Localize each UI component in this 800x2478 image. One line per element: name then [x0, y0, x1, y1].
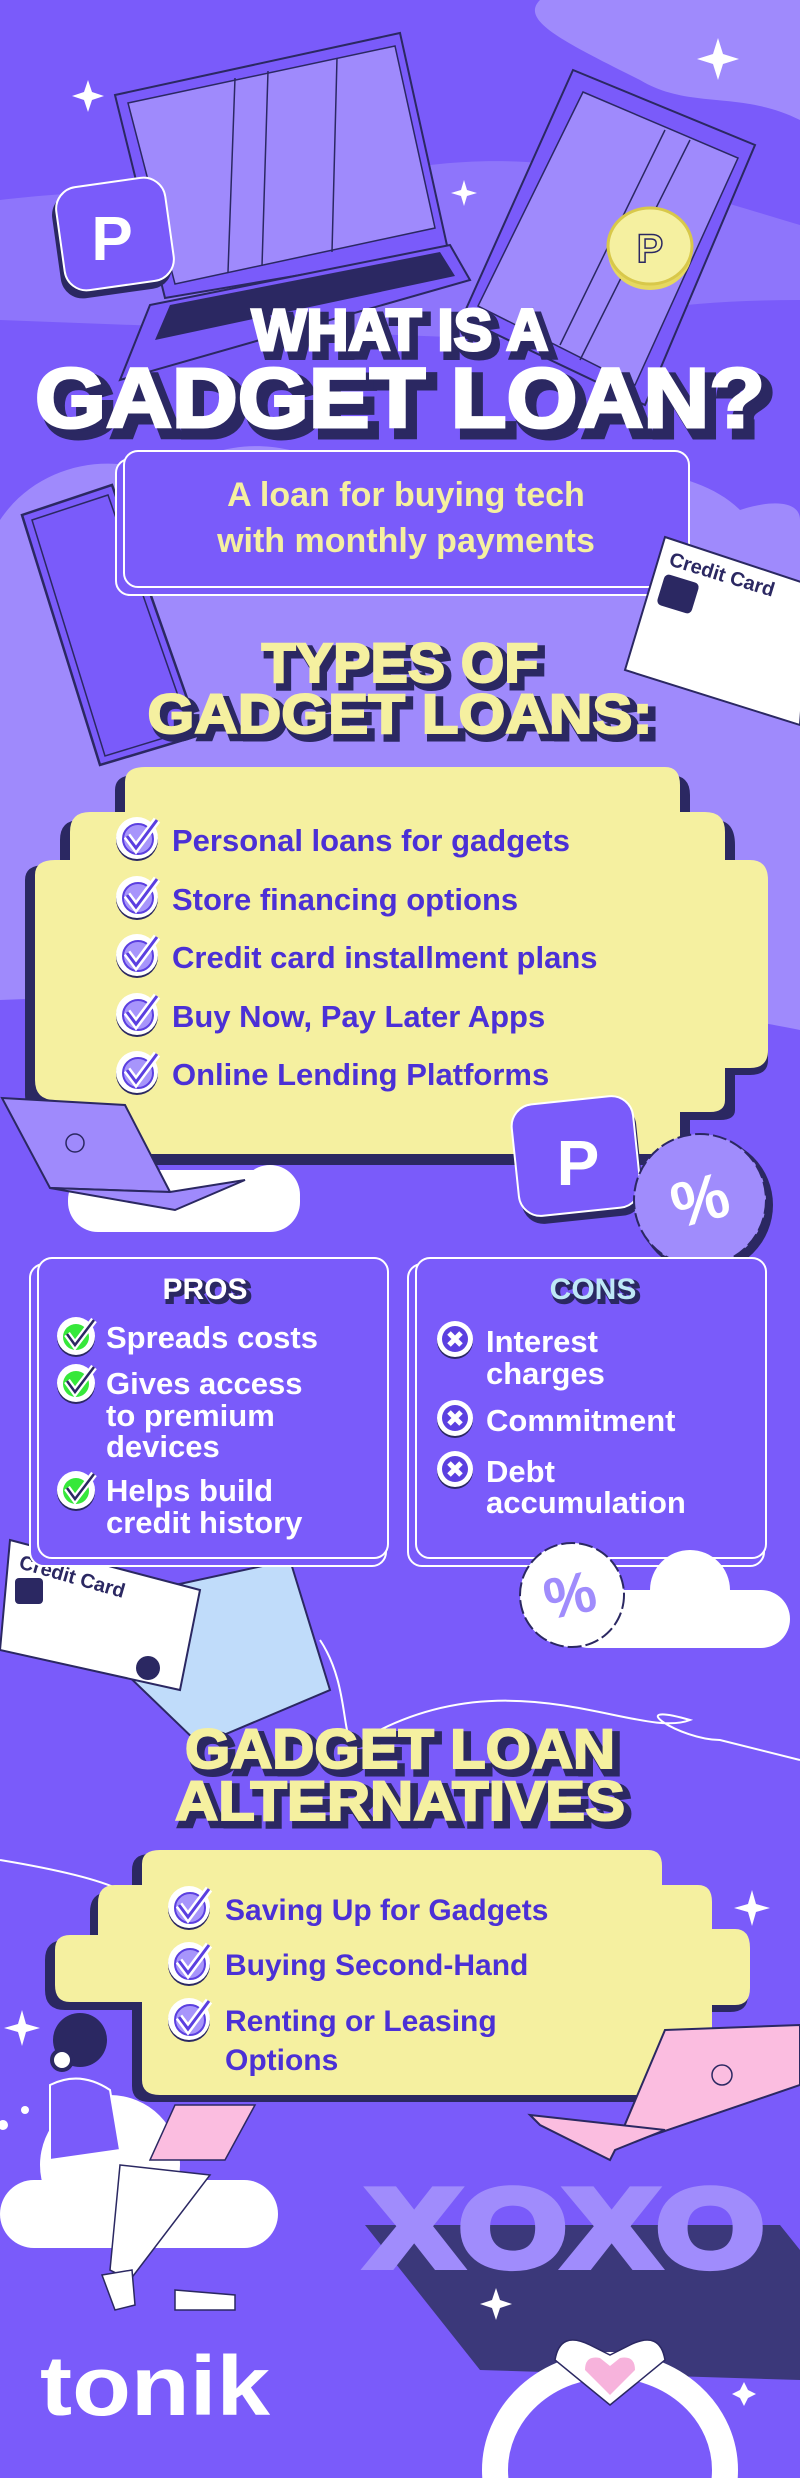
- subtitle box: [116, 451, 689, 595]
- panel: types list: Store financing options: [172, 882, 518, 917]
- XOXO: XOXO: [368, 2167, 764, 2290]
- panel: types list: [25, 767, 768, 1165]
- panel: pros: Spreads costs: [106, 1320, 318, 1355]
- XOXO: [365, 2167, 800, 2380]
- panel: alternatives list: [45, 1850, 750, 2102]
- subtitle box: A loan for buying tech: [227, 476, 585, 514]
- panel: cons: [408, 1258, 766, 1566]
- panel: alternatives list: Saving Up for Gadgets: [225, 1894, 548, 1927]
- title: WHAT IS A: [258, 304, 554, 369]
- panel: cons: Commitment: [486, 1403, 675, 1438]
- title: [35, 298, 773, 453]
- panel: pros: PROS: [165, 1276, 251, 1309]
- panel: cons: charges: [486, 1356, 605, 1391]
- panel: pros: Helps build: [106, 1473, 273, 1508]
- panel: pros: PROS: [162, 1273, 248, 1306]
- panel: alternatives list: Renting or Leasing: [225, 2005, 497, 2038]
- illustration: credit cards: [0, 1540, 330, 1745]
- panel: cons: CONS: [553, 1276, 639, 1309]
- title: GADGET LOAN?: [35, 351, 765, 445]
- icon: P badge: [509, 1094, 646, 1226]
- panel: cons: CONS: [550, 1273, 636, 1306]
- panel: pros: devices: [106, 1429, 220, 1464]
- heading: alternatives: ALTERNATIVES: [180, 1774, 630, 1837]
- illustration: pink laptop: [530, 2025, 800, 2160]
- panel: types list: Personal loans for gadgets: [172, 823, 570, 858]
- credit card top right: Credit Card: [667, 549, 777, 602]
- panel: cons: accumulation: [486, 1485, 686, 1520]
- panel: types list: Credit card installment plans: [172, 940, 598, 975]
- illustration: person on cloud: [0, 2013, 278, 2310]
- icon: heart hands: [495, 2340, 725, 2478]
- illustration: credit cards: Credit Card: [17, 1552, 127, 1603]
- icon: P badge top: P: [91, 205, 133, 274]
- heading: types of gadget loans: GADGET LOANS:: [148, 682, 652, 745]
- heading: alternatives: [175, 1717, 630, 1837]
- logo: tonik: tonik: [40, 2339, 270, 2433]
- icon: coin P: P: [637, 227, 663, 271]
- illustration: cloud with percent: [520, 1543, 790, 1648]
- heading: types of gadget loans: [148, 631, 658, 750]
- illustration: cloud with percent: %: [538, 1558, 602, 1633]
- illustration: cloud + laptop: [2, 1098, 300, 1232]
- heading: alternatives: GADGET LOAN: [185, 1717, 615, 1780]
- icon: coin P: [608, 208, 692, 290]
- icon: percent gear: [634, 1134, 773, 1273]
- panel: types list: Buy Now, Pay Later Apps: [172, 999, 545, 1034]
- icon: percent gear: %: [663, 1158, 737, 1242]
- sparkles: [4, 38, 770, 2046]
- panel: pros: Gives access: [106, 1366, 303, 1401]
- heading: alternatives: GADGET LOAN: [190, 1722, 620, 1785]
- decorative lines: [320, 1640, 800, 1760]
- subtitle box: with monthly payments: [216, 522, 595, 560]
- illustration: tablet: [462, 70, 755, 405]
- heading: alternatives: ALTERNATIVES: [175, 1769, 625, 1832]
- credit card top right: [625, 537, 800, 725]
- panel: pros: credit history: [106, 1505, 303, 1540]
- illustration: phone left: [22, 485, 200, 765]
- icon: P badge: P: [557, 1127, 599, 1199]
- title: GADGET LOAN?: [43, 359, 773, 453]
- illustration: laptop top: [115, 33, 470, 380]
- icon: sparkle small: [480, 2288, 756, 2406]
- panel: alternatives list: Options: [225, 2044, 338, 2077]
- title: WHAT IS A: [252, 298, 548, 363]
- panel: pros: to premium: [106, 1398, 275, 1433]
- panel: cons: Debt: [486, 1454, 555, 1489]
- heading: types of gadget loans: TYPES OF: [262, 631, 538, 694]
- panel: alternatives list: Buying Second-Hand: [225, 1949, 528, 1982]
- icon: P badge top: [49, 175, 177, 301]
- heading: types of gadget loans: TYPES OF: [267, 636, 543, 699]
- panel: cons: Interest: [486, 1324, 598, 1359]
- panel: types list: Online Lending Platforms: [172, 1057, 549, 1092]
- panel: pros: [30, 1258, 388, 1566]
- heading: types of gadget loans: GADGET LOANS:: [152, 687, 658, 750]
